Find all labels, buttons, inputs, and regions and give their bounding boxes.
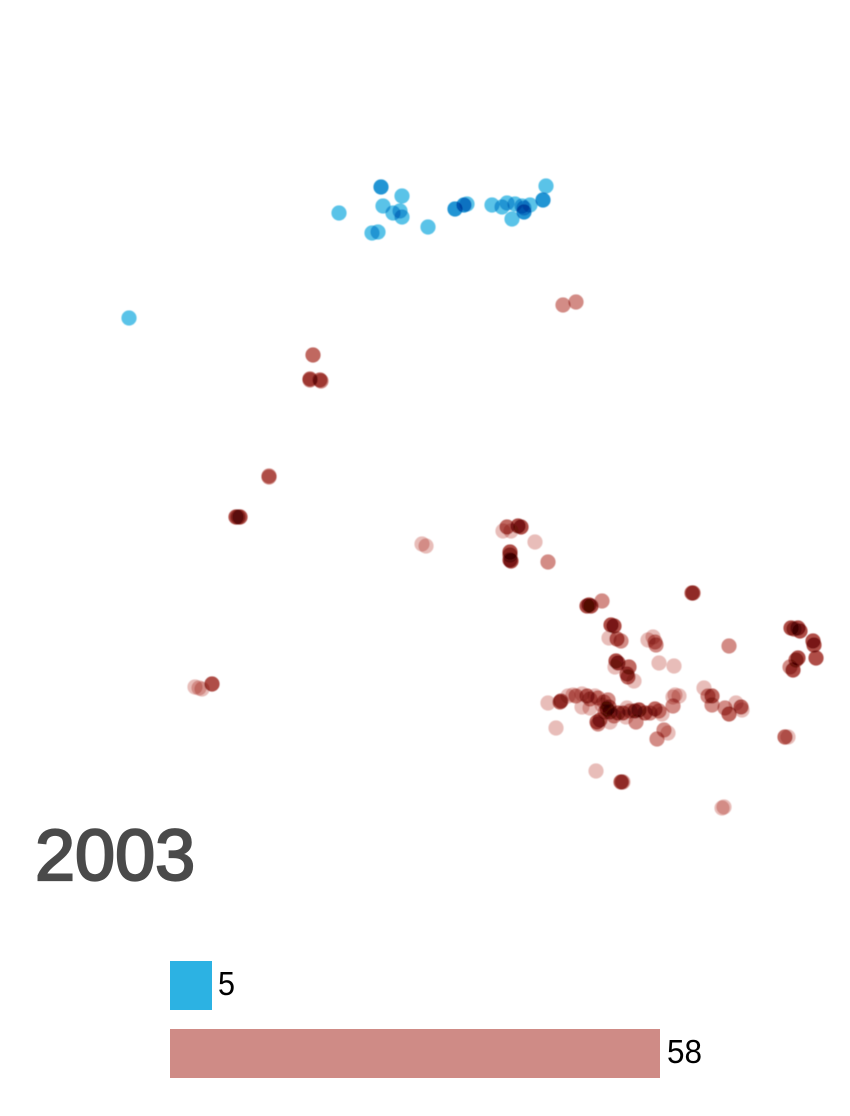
red bar value: 58	[667, 1033, 702, 1070]
red bar	[170, 1029, 660, 1078]
year heading: 2003	[35, 816, 195, 896]
blue bar value: 5	[218, 965, 235, 1002]
red dots	[187, 294, 824, 816]
blue bar	[170, 961, 212, 1010]
blue dots	[121, 178, 554, 326]
